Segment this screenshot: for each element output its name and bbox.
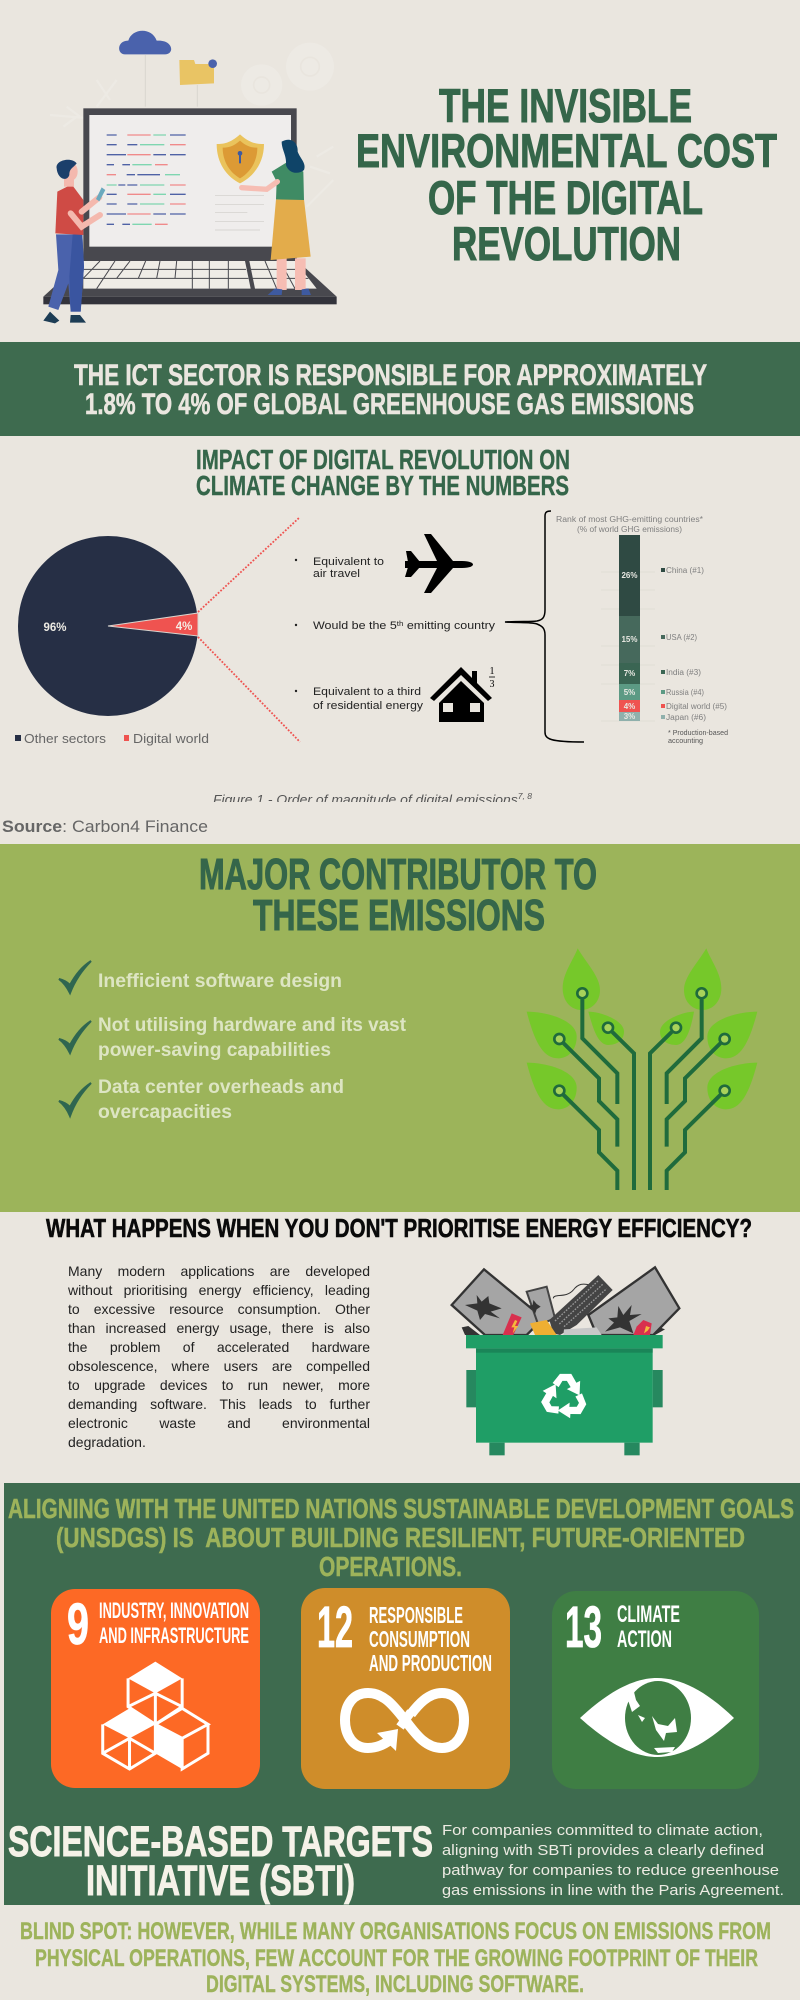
card: SDG 13 xyxy=(552,1591,759,1789)
text: energy efficiency paragraph xyxy=(68,1263,370,1450)
man with phone xyxy=(43,160,105,323)
heading: aligning with UNSDGs: OPERATIONS. xyxy=(319,1551,462,1582)
heading: major contributor xyxy=(199,850,597,940)
figure caption: Figure 1 - Order of magnitude of digital emissions xyxy=(213,792,498,807)
decorative gears xyxy=(241,43,334,106)
title: THE INVISIBLE xyxy=(439,79,692,132)
card: SDG 9: AND INFRASTRUCTURE xyxy=(99,1623,249,1648)
stacked bar: GHG-emitting countries: 26% xyxy=(621,571,638,580)
text: energy efficiency paragraph: degradation. xyxy=(68,1434,146,1450)
text: energy efficiency paragraph: than increased energy usage, there is also xyxy=(68,1320,370,1336)
text: energy efficiency paragraph: without prioritising energy efficiency, leading xyxy=(68,1282,370,1298)
text: energy efficiency paragraph: demanding software. This leads to further xyxy=(68,1396,370,1412)
check list: Data center overheads and xyxy=(98,1077,344,1098)
panel: major contributor xyxy=(0,844,800,1212)
stacked bar: GHG-emitting countries xyxy=(556,515,728,745)
card: SDG 12: CONSUMPTION xyxy=(369,1626,470,1652)
heading: impact by the numbers: IMPACT OF DIGITAL REVOLUTION ON xyxy=(196,444,570,475)
card: SDG 12: AND PRODUCTION xyxy=(369,1650,492,1676)
icon: house with one third: 1 xyxy=(490,666,494,677)
bin body xyxy=(466,1335,663,1455)
dotted zoom lines xyxy=(198,517,300,742)
source line: Source : Carbon4 Finance xyxy=(2,818,208,836)
comparison bullets: Equivalent to xyxy=(313,556,384,568)
icon: e-waste recycling bin xyxy=(452,1267,679,1455)
check list: overcapacities xyxy=(98,1102,232,1123)
title xyxy=(356,79,777,270)
heading: impact by the numbers: CLIMATE CHANGE BY THE NUMBERS xyxy=(196,470,569,501)
comparison bullets: Equivalent to a third xyxy=(313,686,421,698)
pie chart: digital share xyxy=(18,536,198,716)
heading: science-based targets: SCIENCE-BASED TARGETS xyxy=(8,1818,433,1866)
heading: major contributor: MAJOR CONTRIBUTOR TO xyxy=(199,850,597,899)
stacked bar: GHG-emitting countries: China (#1) xyxy=(666,566,704,575)
text: energy efficiency paragraph: the problem of accelerated hardware xyxy=(68,1339,370,1355)
card: SDG 9: INDUSTRY, INNOVATION xyxy=(99,1598,249,1623)
check list: Not utilising hardware and its vast xyxy=(98,1015,407,1036)
stacked bar: GHG-emitting countries: 7% xyxy=(624,669,635,678)
text: SBTi description xyxy=(442,1822,784,1899)
card: SDG 12: 12 xyxy=(317,1595,353,1660)
stacked bar: GHG-emitting countries: 5% xyxy=(624,688,635,697)
stacked bar: GHG-emitting countries: India (#3) xyxy=(666,668,701,677)
stacked bar: GHG-emitting countries: Japan (#6) xyxy=(666,713,706,722)
stacked bar: GHG-emitting countries: USA (#2) xyxy=(666,633,697,642)
comparison bullets: air travel xyxy=(313,568,360,580)
pie legend: Digital world xyxy=(133,731,209,746)
heading: aligning with UNSDGs xyxy=(8,1493,794,1582)
illustration: people at a laptop with security shield xyxy=(43,31,337,323)
laptop xyxy=(43,108,337,304)
text: SBTi description: For companies committed to climate action, xyxy=(442,1822,763,1839)
pie chart: digital share: 96% xyxy=(43,622,67,634)
card: SDG 12: RESPONSIBLE xyxy=(369,1602,463,1628)
recycle symbol xyxy=(537,1374,590,1422)
comparison bullets: of residential energy xyxy=(313,700,424,712)
stacked bar: GHG-emitting countries: (% of world GHG emissions) xyxy=(577,525,682,534)
stacked bar: GHG-emitting countries: 4% xyxy=(624,702,635,711)
folder xyxy=(179,59,217,107)
stacked bar: GHG-emitting countries: 15% xyxy=(621,635,638,644)
check list xyxy=(59,961,407,1123)
icon: house with one third: 3 xyxy=(490,679,494,690)
card: SDG 9 xyxy=(51,1589,260,1788)
figure caption: 7, 8 xyxy=(518,792,533,801)
text: SBTi description: aligning with SBTi provides a clearly defined xyxy=(442,1842,764,1859)
stacked bar: GHG-emitting countries: Digital world (#5) xyxy=(666,702,727,711)
text: energy efficiency paragraph: to excessive resource consumption. Other xyxy=(68,1301,370,1317)
stacked bar: GHG-emitting countries: Russia (#4) xyxy=(666,688,704,697)
text: SBTi description: gas emissions in line with the Paris Agreement. xyxy=(442,1882,784,1899)
icon: cubes xyxy=(103,1662,208,1769)
code lines on screen xyxy=(107,135,264,230)
heading: impact by the numbers xyxy=(196,444,570,501)
icon: infinity loop xyxy=(345,1693,464,1751)
comparison bullets: Would be the 5 xyxy=(313,620,387,632)
e-waste pile xyxy=(452,1267,679,1335)
text: energy efficiency paragraph: Many modern applications are developed xyxy=(68,1263,370,1279)
curly brace xyxy=(505,511,584,742)
check list: Inefficient software design xyxy=(98,971,342,992)
icon: circuit tree xyxy=(527,948,757,1190)
check list: power-saving capabilities xyxy=(98,1040,331,1061)
pie chart: digital share: 4% xyxy=(176,621,192,633)
cloud xyxy=(119,31,171,107)
icon: airplane xyxy=(405,534,473,593)
stacked bar: GHG-emitting countries: Rank of most GHG-emitting countries* xyxy=(556,515,703,524)
title: REVOLUTION xyxy=(452,217,681,270)
stacked bar: GHG-emitting countries: 3% xyxy=(624,712,635,721)
icon: eye with globe xyxy=(580,1678,734,1757)
heading: science-based targets xyxy=(8,1818,433,1905)
woman presenting xyxy=(242,140,311,295)
pie legend: Other sectors xyxy=(24,731,107,746)
comparison bullets: th xyxy=(397,621,404,628)
text: energy efficiency paragraph: to upgrade devices to run newer, more xyxy=(68,1377,370,1393)
heading: major contributor: THESE EMISSIONS xyxy=(253,891,545,940)
stacked bar: GHG-emitting countries: * Production-based xyxy=(668,730,728,737)
pie legend xyxy=(15,731,209,746)
text: SBTi description: pathway for companies to reduce greenhouse xyxy=(442,1862,779,1879)
card: SDG 13: CLIMATE xyxy=(617,1601,680,1628)
banner: ICT sector emissions xyxy=(0,342,800,436)
comparison bullets xyxy=(295,556,496,712)
stacked bar: GHG-emitting countries: accounting xyxy=(668,738,703,745)
card: SDG 13: ACTION xyxy=(617,1626,672,1653)
text: energy efficiency paragraph: electronic waste and environmental xyxy=(68,1415,370,1431)
card: SDG 13: 13 xyxy=(565,1595,602,1660)
callout: blind spot xyxy=(20,1918,771,1998)
comparison bullets: emitting country xyxy=(403,620,496,632)
title: OF THE DIGITAL xyxy=(428,171,703,224)
icon: house with one third xyxy=(430,666,495,722)
text: energy efficiency paragraph: obsolescence, where users are compelled xyxy=(68,1358,370,1374)
panel: UN SDGs and SBTi xyxy=(4,1483,800,1905)
card: SDG 9: 9 xyxy=(67,1592,89,1657)
shield xyxy=(217,134,264,183)
card: SDG 12 xyxy=(301,1588,510,1789)
callout: blind spot: DIGITAL SYSTEMS, INCLUDING SOFTWARE. xyxy=(206,1971,584,1998)
heading: science-based targets: INITIATIVE (SBTI) xyxy=(86,1857,355,1905)
